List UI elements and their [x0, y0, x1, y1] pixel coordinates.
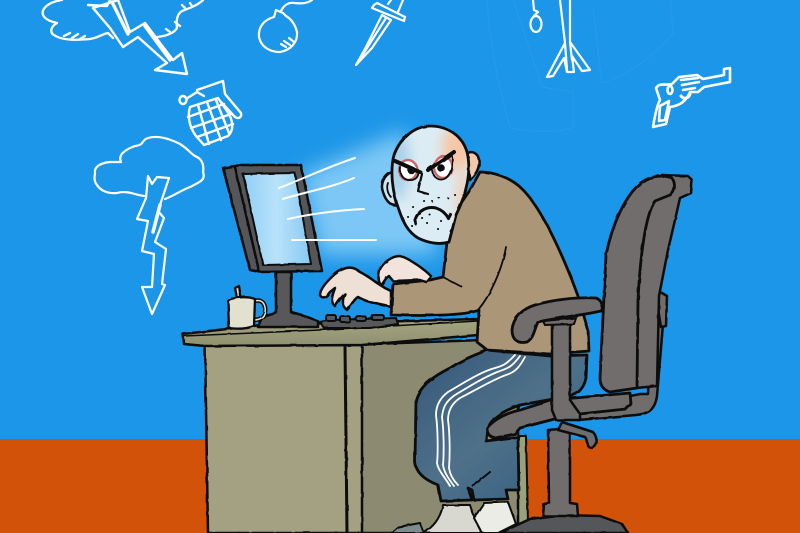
monitor: stand: [258, 272, 318, 327]
doodle: noose and gallows: [530, 0, 590, 77]
doodle: grenade: [180, 81, 241, 145]
light beam from screen to face: [300, 130, 440, 255]
man: nose: [418, 174, 428, 194]
man: face shading: [393, 129, 468, 222]
keyboard: [320, 315, 398, 328]
man: [320, 124, 589, 533]
man: head: [386, 124, 474, 243]
chair: backrest front panel: [600, 176, 674, 392]
chair: armrest: [512, 298, 602, 342]
man: right ear: [466, 152, 479, 180]
chair: backrest rear panel: [630, 175, 692, 388]
man: left eye: [399, 160, 417, 180]
desk: side panel: [345, 340, 518, 533]
man: right eye: [434, 156, 452, 178]
monitor: white speed lines: [279, 158, 376, 240]
desk: front panel: [205, 345, 362, 533]
coffee mug with spoon: [228, 286, 265, 329]
chair: front parts: [487, 298, 631, 438]
background: orange floor: [0, 439, 800, 533]
chair: arm support: [552, 322, 580, 420]
man: far hand: [379, 256, 431, 285]
doodle: dagger: [356, 0, 405, 65]
doodle: lower cloud with lightning: [94, 137, 204, 314]
man: eye outlines: [400, 156, 452, 180]
desk: top: [183, 319, 480, 346]
doodle: revolver: [653, 68, 730, 127]
chair: rear parts: [500, 175, 692, 533]
chair: base: [500, 515, 628, 533]
man: sweater: [391, 172, 589, 354]
monitor: screen: [243, 173, 311, 265]
man: right shoe: [474, 502, 516, 533]
man: frown: [415, 208, 450, 224]
desk: [183, 319, 528, 533]
man: left shoe: [423, 505, 482, 533]
chair: back frame: [575, 294, 665, 420]
trouser stripes: [436, 355, 525, 486]
man: eyebrows: [395, 152, 454, 172]
man: grey shoe tip: [391, 523, 424, 533]
faint ghost sketch lines: [487, 0, 673, 131]
man: left ear: [382, 172, 399, 205]
monitor: housing: [223, 165, 322, 272]
man: near hand: [320, 268, 391, 310]
chair: seat: [487, 393, 631, 438]
man: stubble: [408, 195, 455, 229]
chair: tilt lever: [558, 422, 597, 448]
desk: back leg: [514, 436, 528, 526]
man: trousers: [415, 350, 587, 501]
doodle: bomb: [259, 0, 312, 52]
doodle: top-left cloud with lightning: [43, 0, 203, 74]
monitor: [223, 165, 322, 327]
chair: gas post: [543, 428, 578, 516]
